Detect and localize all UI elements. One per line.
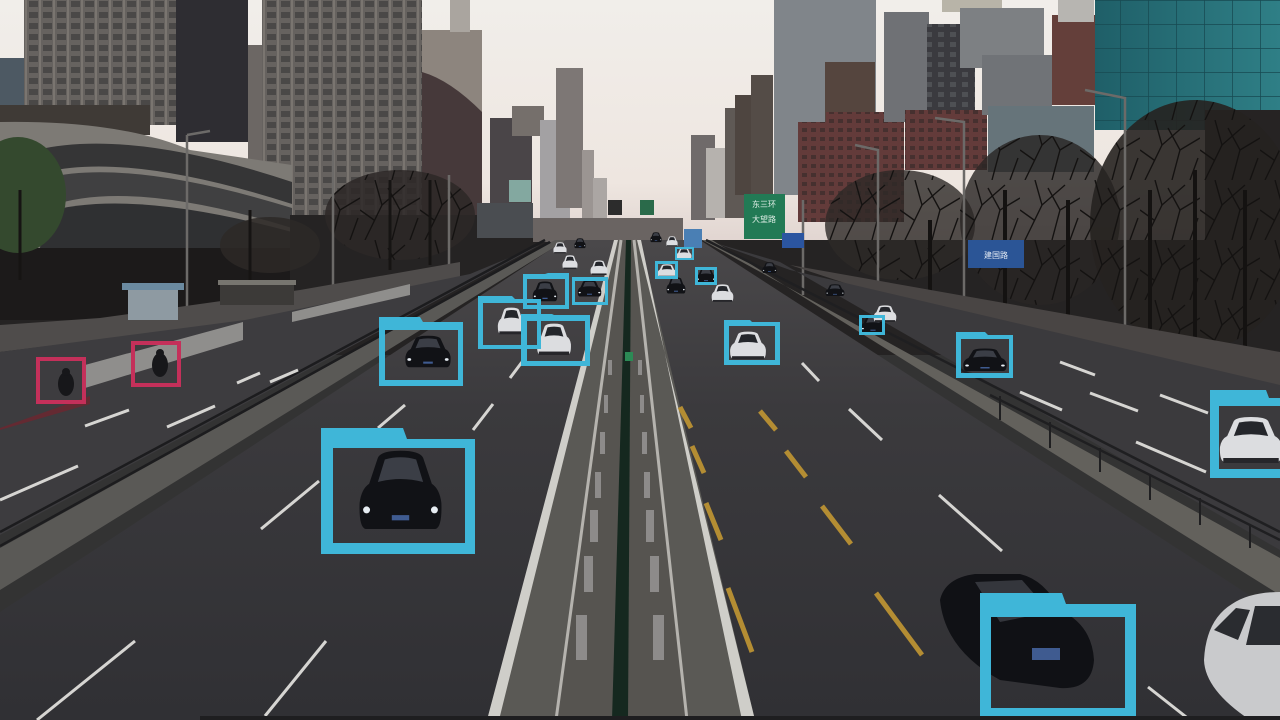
box: white car behind (478, 296, 541, 349)
box: motorcyclist left (38, 359, 84, 402)
sign: blue direction board: 建国路 (984, 250, 1008, 260)
cropped white car, lower right (1204, 592, 1280, 720)
left side road (0, 245, 540, 535)
box: side road car (956, 332, 1013, 378)
median bollards (576, 352, 664, 660)
ground band behind trees (0, 215, 1280, 355)
left sidewalk (0, 262, 460, 352)
bus stops on the left pavement (122, 280, 296, 320)
box: distant car (675, 247, 694, 260)
right side road (715, 243, 1280, 550)
right sidewalk (790, 265, 1280, 388)
box: side road pair (859, 315, 885, 335)
box: white car right lane (724, 320, 780, 365)
bottom shadow strip (200, 716, 1280, 720)
detected vehicles (360, 248, 1280, 720)
blurred dark car, lower right (940, 574, 1094, 688)
left barrier (0, 240, 566, 590)
building: curved low-rise on the left (0, 105, 300, 323)
motorcyclists (58, 349, 168, 396)
box: motorcyclist right (133, 343, 179, 385)
sign: green direction board: 东三环 (752, 199, 776, 209)
trees: right roadside (187, 90, 1280, 390)
box: car lane left (379, 317, 463, 386)
distant traffic (553, 229, 844, 302)
sky (0, 0, 1280, 260)
buildings: right skyline (691, 0, 1280, 240)
overhead signs (477, 180, 1024, 268)
central median (487, 240, 755, 720)
right barrier (702, 240, 1280, 595)
box: small car (655, 261, 678, 279)
trees: left roadside (0, 137, 475, 285)
box: distant car right (572, 277, 608, 305)
box: white car centre (521, 314, 590, 366)
box: distant car left (523, 273, 569, 309)
sign: grey gantry board (477, 203, 533, 238)
sign: blue direction board (968, 240, 1024, 268)
detection boxes: vehicles (cyan) (321, 247, 1280, 716)
box: far-right white car (1210, 390, 1280, 478)
right main roadway (638, 240, 1280, 720)
box: lower-right blurred car (980, 593, 1136, 716)
left main roadway (0, 240, 618, 720)
sign: green direction board: 大望路 (752, 214, 776, 224)
hazy distant treeline (533, 218, 683, 242)
white fences on left road (85, 284, 410, 388)
sign: green direction board (744, 194, 785, 239)
box: small car teal (695, 267, 717, 285)
detection boxes: motorcycles (red) (38, 343, 179, 402)
buildings: left skyline (0, 0, 607, 240)
lane markings (0, 362, 1208, 720)
box: large car left (321, 428, 475, 554)
